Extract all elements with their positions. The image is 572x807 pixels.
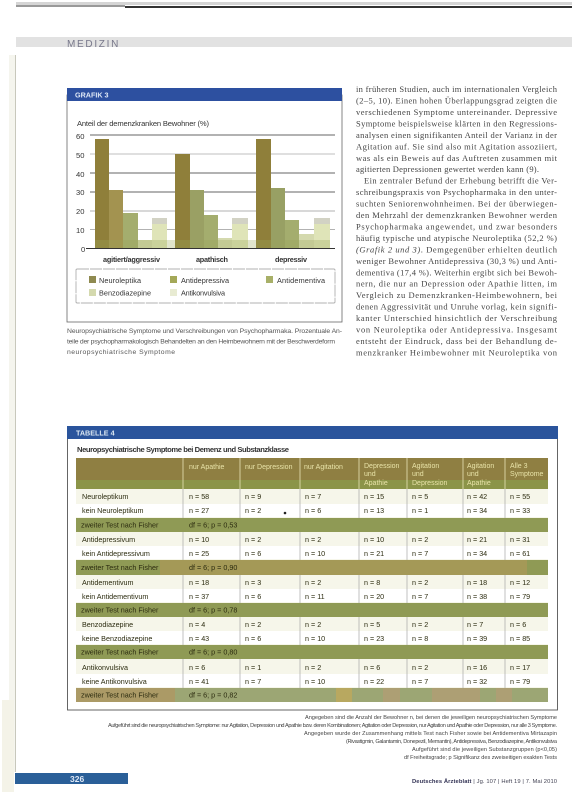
rows: Antikonvulsiva: n = 6 [364, 663, 380, 672]
category labels: apathisch [196, 255, 228, 264]
table body grid [76, 489, 548, 702]
band: Fisher test 3 [76, 603, 548, 617]
body text column: menzkranker Heimbewohner mit Neuroleptika von [356, 347, 558, 357]
band: Fisher test 2: df = 6; p = 0,90 [189, 563, 237, 572]
rows: Antidepressivum: n = 6 [245, 549, 261, 558]
body text column: (Grafik 2 und 3). Demgegenüber erhielten deutlich [356, 244, 558, 254]
rows: Benzodiazepine: n = 39 [467, 634, 487, 643]
rows: Antidementivum: n = 11 [305, 592, 325, 601]
body text column: agitierten Depressionen gewertet werden kann (9). [356, 164, 539, 174]
caption: Grafik 3: teile der psychopharmakologisch Behandelten an den Heimbewohnern mit der Beschwerdeform [67, 338, 335, 346]
rows: Neuroleptikum: n = 1 [412, 506, 428, 515]
rows: Antidementivum: n = 8 [364, 578, 380, 587]
body text column: nern, die nur an Depression oder Apathie litten, im [356, 279, 557, 289]
rows: Antikonvulsiva: n = 10 [305, 677, 325, 686]
body text column: kanter Unterschied hinsichtlich der Verschreibung [356, 313, 558, 323]
bars: depressiv [256, 139, 330, 248]
caption: Grafik 3: neuropsychiatrische Symptome [67, 349, 175, 356]
body text column: den Mehrzahl der demenzkranken Bewohner werden [356, 210, 558, 220]
rows: Antikonvulsiva [82, 663, 530, 686]
table title: Neuropsychiatrische Symptome bei Demenz und Substanzklasse [77, 445, 289, 454]
panel: Grafik 3 [67, 88, 342, 322]
section band: Medizin: MEDIZIN [67, 39, 120, 50]
rows: Antidepressivum [82, 535, 530, 558]
caption: Grafik 3: Neuropsychiatrische Symptome und Verschreibungen von Psychopharmaka. Prozentuale An- [67, 328, 342, 335]
rows: Neuroleptikum: n = 27 [189, 506, 209, 515]
footnotes: (Rivastigmin, Galantamin, Donepezil, Memantin), Antidepressiva, Benzodiazepine, Antikonvulsiva [346, 739, 558, 745]
caption: Grafik 3 [67, 328, 342, 356]
rows: Antidepressivum: n = 31 [510, 535, 530, 544]
rows: Benzodiazepine: keine Benzodiazepine [82, 634, 152, 643]
table head row: nur Depression [245, 464, 293, 471]
rows: Neuroleptikum: n = 7 [305, 492, 321, 501]
rows: Antidementivum: n = 6 [245, 592, 261, 601]
band: Fisher test 4: df = 6; p = 0,80 [189, 648, 237, 656]
rows: Antidementivum: n = 20 [364, 592, 384, 601]
rows: Neuroleptikum: Neuroleptikum [82, 492, 128, 501]
rows: Antikonvulsiva: n = 22 [364, 677, 384, 686]
rows: Neuroleptikum: n = 6 [305, 506, 321, 515]
rows: Antidepressivum: n = 34 [467, 549, 487, 558]
body text column: entsteht der Eindruck, dass bei der Behandlung de- [356, 336, 557, 346]
rows: Benzodiazepine: n = 10 [305, 634, 325, 643]
footer: journal reference: Deutsches Ärzteblatt | Jg. 107 | Heft 19 | 7. Mai 2010 [412, 778, 557, 785]
rows: Antikonvulsiva: keine Antikonvulsiva [82, 677, 147, 686]
rows: Neuroleptikum: n = 9 [245, 492, 261, 501]
rows: Antidementivum: Antidementivum [82, 578, 134, 587]
rows: Neuroleptikum: n = 15 [364, 492, 384, 501]
band: Fisher test 3: df = 6; p = 0,78 [189, 606, 237, 614]
table head row: nur Agitation [304, 464, 343, 471]
rows: Antikonvulsiva: n = 2 [412, 663, 428, 672]
bar chart: 50 [76, 151, 84, 160]
rows: Antidementivum: n = 79 [510, 592, 530, 601]
body text column [356, 84, 558, 357]
rows: Benzodiazepine: n = 5 [364, 620, 380, 629]
rows: Neuroleptikum: n = 34 [467, 506, 487, 515]
rows: Benzodiazepine: n = 6 [510, 620, 526, 629]
rows: Antikonvulsiva: n = 41 [189, 677, 209, 686]
rows: Benzodiazepine: n = 2 [245, 620, 261, 629]
band: Fisher test 1 [76, 518, 548, 532]
rows: Benzodiazepine: n = 2 [412, 620, 428, 629]
band: Fisher test 1: zweiter Test nach Fisher [81, 520, 159, 530]
body text column: Ein zentraler Befund der Erhebung betrifft die Ver- [364, 176, 557, 186]
table head row: Depression [412, 480, 448, 487]
legend [76, 269, 335, 303]
band: Fisher test 5: df = 6; p = 0,82 [189, 690, 237, 700]
bar chart: 40 [76, 170, 84, 179]
rows: Antikonvulsiva: Antikonvulsiva [82, 663, 128, 672]
footnotes: Aufgeführt sind die jeweiligen Substanzgruppen (p<0,05) [412, 747, 557, 753]
band: Fisher test 3: zweiter Test nach Fisher [81, 606, 159, 614]
rows: Neuroleptikum: n = 58 [189, 492, 209, 501]
rows: Antidementivum: n = 38 [467, 592, 487, 601]
table head row: Alle 3 [510, 463, 528, 470]
body text column: dementiva (17,4 %). Weiterhin ergibt sich bei Bewoh- [356, 267, 557, 277]
body text column: häufig typische und atypische Neuroleptika (52,2 %) [356, 233, 557, 243]
chart title: Anteil der demenzkranken Bewohner (%) [77, 119, 209, 128]
rows: Benzodiazepine: n = 2 [305, 620, 321, 629]
rows: Benzodiazepine: n = 6 [245, 634, 261, 643]
rows: Neuroleptikum: n = 42 [467, 492, 487, 501]
footnotes: Angegeben wurde der Zusammenhang mittels Test nach Fisher sowie bei Antidementiva Mirtazapin [304, 731, 557, 737]
table head row: Agitation [467, 463, 494, 470]
footnotes: Aufgeführt sind die neuropsychiatrischen Symptome: nur Agitation, Depression und Apathie bzw. deren Kombinationen; Agitation oder Depression, nur Agitation und Apathie oder Depression, nur alle 3 Symptome. [108, 723, 557, 729]
bar chart: 30 [76, 188, 84, 197]
table head row: Agitation [412, 463, 439, 470]
rows: Antidepressivum: n = 10 [364, 535, 384, 544]
table head row: Apathie [364, 480, 388, 487]
rows: Antikonvulsiva: n = 79 [510, 677, 530, 686]
rows: Antikonvulsiva: n = 16 [467, 663, 487, 672]
Grafik 3 header: GRAFIK 3 [75, 90, 109, 100]
page number band: 326 [70, 774, 84, 784]
footnotes [108, 715, 558, 761]
rows: Benzodiazepine: n = 4 [189, 620, 205, 629]
rows: Antidementivum: n = 18 [467, 578, 487, 587]
rows: Benzodiazepine [82, 620, 530, 643]
body text column: denen Aggressivität und Unruhe vorlag, kein signifi- [356, 302, 557, 312]
legend: Neuroleptika [99, 276, 142, 285]
rows: Antikonvulsiva: n = 32 [467, 677, 487, 686]
footnotes: df Freiheitsgrade; p Signifikanz des zweiseitigen exakten Tests [404, 755, 557, 761]
rows: Antidepressivum: n = 10 [189, 535, 209, 544]
rows: Antidementivum: n = 2 [305, 578, 321, 587]
rows: Benzodiazepine: n = 7 [467, 620, 483, 629]
table head row: Apathie [467, 480, 491, 487]
table head row: nur Apathie [189, 464, 225, 471]
legend: Antidepressiva [181, 276, 230, 285]
rows: Antidementivum: kein Antidementivum [82, 592, 148, 601]
rows: Benzodiazepine: Benzodiazepine [82, 620, 133, 629]
body text column: verschiedenen Symptome untereinander. Depressive [356, 107, 557, 117]
band: Fisher test 2 [76, 560, 548, 575]
table head row: und [364, 471, 376, 478]
body text column: Symptome beispielsweise klärten in den Regressions- [356, 118, 557, 128]
rows: Benzodiazepine: n = 23 [364, 634, 384, 643]
rows: Antidepressivum: n = 10 [305, 549, 325, 558]
body text column: was als ein Beweis auf das Auftreten zusammen mit [356, 153, 558, 163]
rows: Antidepressivum: n = 61 [510, 549, 530, 558]
rows: Antidementivum: n = 18 [189, 578, 209, 587]
rows: Neuroleptikum: n = 5 [412, 492, 428, 501]
rows: Antikonvulsiva: n = 1 [245, 663, 261, 672]
band: Fisher test 4 [76, 645, 548, 659]
band: Fisher test 5 [76, 688, 548, 702]
legend: Benzodiazepine [99, 288, 151, 298]
band: Fisher test 5: zweiter Test nach Fisher [81, 690, 159, 700]
legend: Antidementiva [277, 276, 326, 285]
rows: Antikonvulsiva: n = 7 [412, 677, 428, 686]
bar chart: 60 [76, 132, 84, 141]
rows: Antidementivum: n = 37 [189, 592, 209, 601]
Tabelle 4 header [67, 426, 558, 439]
rows: Benzodiazepine: n = 85 [510, 634, 530, 643]
bar chart: 0 [81, 245, 85, 254]
rows: Neuroleptikum: n = 2 [245, 506, 261, 515]
bar chart: 20 [76, 207, 84, 216]
rows: Antikonvulsiva: n = 7 [245, 677, 261, 686]
body text column: (2–5, 10). Einen hohen Überlappungsgrad zeigten die [356, 96, 557, 106]
rows: Antidementivum: n = 7 [412, 592, 428, 601]
rows: Antidepressivum: n = 7 [412, 549, 428, 558]
legend: Antikonvulsiva [181, 288, 226, 298]
rows: Antidepressivum: n = 2 [305, 535, 321, 544]
panel: Tabelle 4 [67, 426, 558, 710]
body text column: Agitation auf. Sie sind also mit Agitation assoziiert, [356, 141, 557, 151]
rows: Benzodiazepine: n = 43 [189, 634, 209, 643]
body text column: Psychopharmaka angewendet, und zwar besonders [356, 222, 557, 232]
body text column: schreibungspraxis von Psychopharmaka in den unter- [356, 187, 557, 197]
table head row: Symptome [510, 471, 544, 478]
category labels: agitiert/aggressiv [103, 255, 161, 264]
bars: apathisch [175, 154, 248, 248]
page edge: left scan margin [2, 55, 16, 792]
rows: Antidepressivum: n = 25 [189, 549, 209, 558]
rows: Antidepressivum: n = 21 [467, 535, 487, 544]
rows: Neuroleptikum: n = 55 [510, 492, 530, 501]
band: Fisher test 1: df = 6; p = 0,53 [189, 520, 237, 530]
page number band [15, 773, 128, 784]
body text column: von Neuroleptika oder Antidepressiva. Insgesamt [356, 324, 558, 334]
band: Fisher test 4: zweiter Test nach Fisher [81, 648, 159, 656]
body text column: in früheren Studien, auch im internationalen Vergleich [356, 84, 558, 94]
rows: Antidepressivum: n = 21 [364, 549, 384, 558]
rows: Neuroleptikum: n = 33 [510, 506, 530, 515]
rows: Antidepressivum: kein Antidepressivum [82, 549, 150, 558]
table head row: und [412, 471, 424, 478]
rows: Neuroleptikum: kein Neuroleptikum [82, 506, 144, 515]
rows: Antikonvulsiva: n = 2 [305, 663, 321, 672]
Tabelle 4 header: TABELLE 4 [76, 428, 115, 438]
rows: Antikonvulsiva: n = 6 [189, 663, 205, 672]
table head row [76, 458, 548, 489]
rows: Antidepressivum: Antidepressivum [82, 535, 135, 544]
category labels: depressiv [275, 255, 308, 264]
rows: Antikonvulsiva: n = 17 [510, 663, 530, 672]
band: Fisher test 2: zweiter Test nach Fisher [81, 563, 159, 572]
rows: Benzodiazepine: n = 8 [412, 634, 428, 643]
bar chart: 10 [76, 226, 84, 235]
table head row: Depression [364, 463, 400, 470]
rows: Antidementivum [82, 578, 530, 601]
rows: Antidepressivum: n = 2 [412, 535, 428, 544]
body text column: Vergleich zu Demenzkranken-Heimbewohnern, bei [356, 290, 558, 300]
Grafik 3 header [67, 88, 342, 101]
top rule [16, 2, 572, 8]
footnotes: Angegeben sind die Anzahl der Bewohner n, bei denen die jeweiligen neuropsychiatrischen Symptome [305, 715, 557, 721]
rows: Neuroleptikum [82, 492, 530, 515]
body text column: weniger Bewohner Antidepressiva (30,3 %) und Anti- [356, 256, 557, 266]
rows: Antidementivum: n = 12 [510, 578, 530, 587]
category labels [103, 255, 308, 264]
bars: agitiert/aggressiv [95, 139, 167, 248]
body text column: suchten Seniorenwohnheimen. Bei der überwiegen- [356, 199, 557, 209]
rows: Antidepressivum: n = 2 [245, 535, 261, 544]
body text column: analysen einen signifikanten Anteil der Varianz in der [356, 130, 557, 140]
rows: Antidementivum: n = 3 [245, 578, 261, 587]
section band: Medizin [16, 37, 572, 50]
bar chart [76, 132, 335, 264]
rows: Antidementivum: n = 2 [412, 578, 428, 587]
table head row: und [467, 471, 479, 478]
rows: Neuroleptikum: n = 13 [364, 506, 384, 515]
